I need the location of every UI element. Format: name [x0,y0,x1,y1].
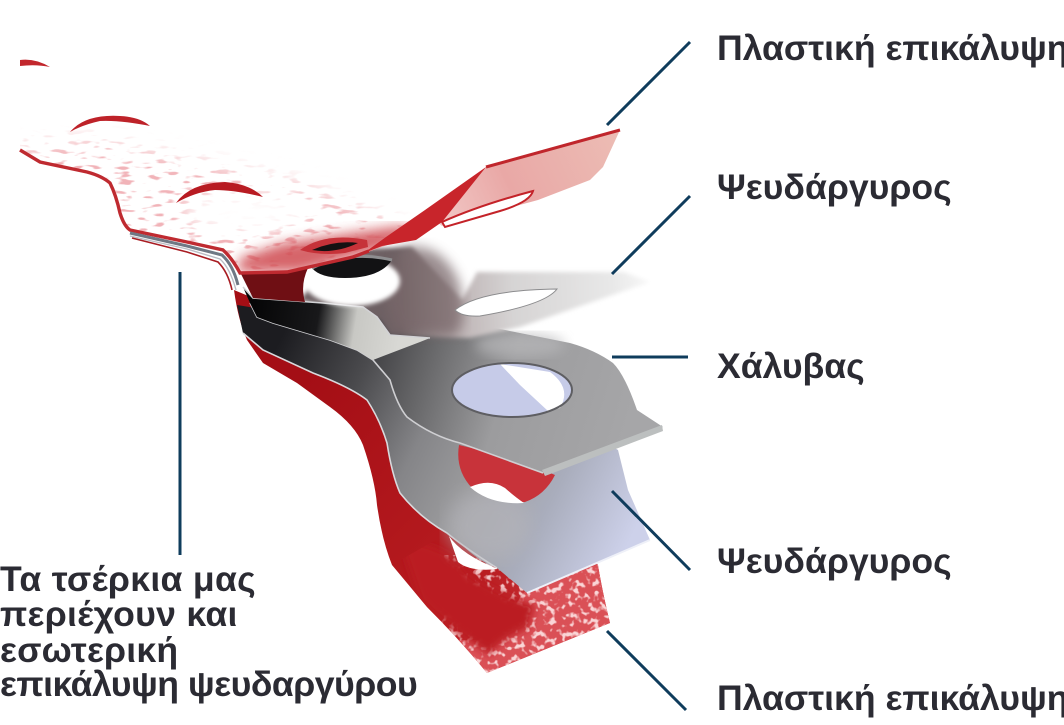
hidden layer edges [130,233,238,285]
layer: upper zinc coating [240,247,650,360]
text block: inner zinc note: εσωτερική [0,630,178,670]
steel front edge [542,425,663,476]
zinc edge line [243,287,430,338]
label: top plastic coating: Πλαστική επικάλυψη [717,28,1064,68]
white notch in lower zinc [449,536,498,570]
wing slot [442,191,533,227]
speckled foot [450,565,610,673]
strap body [20,60,430,273]
zinc slot [455,289,557,316]
soft highlight on lower zinc [448,490,532,560]
zinc hump shadow [385,247,463,336]
bright sheet lower edge [527,540,650,593]
label: lower zinc: Ψευδάργυρος [717,541,952,581]
label: steel: Χάλυβας [717,346,865,386]
lower zinc hole [458,445,555,503]
text block: inner zinc note: περιέχουν και [0,594,238,634]
text block: inner zinc note: επικάλυψη ψευδαργύρου [0,664,417,704]
strap lower edge [20,150,369,273]
red hole arcs [20,60,50,67]
text block: inner zinc note [0,559,417,704]
red fade near the front [238,226,425,272]
label: upper zinc: Ψευδάργυρος [717,167,952,207]
label: bottom plastic coating: Πλαστική επικάλυψη [717,678,1064,718]
layer: lower zinc coating [237,305,650,593]
layer: bottom plastic coating [234,290,620,680]
dark red under strap [240,268,308,302]
wing [428,130,620,226]
steel highlight [475,333,565,357]
front hole [300,238,368,254]
text block: inner zinc note: Τα τσέρκια μας [0,559,256,599]
layer: top plastic coating [15,60,620,290]
zinc hole [304,256,400,306]
dark band under zinc [243,287,430,360]
strap speckle [20,130,402,270]
steel hole [452,363,572,417]
leader lines [180,42,690,710]
dark red fold [412,555,540,658]
layer: steel [250,303,663,476]
